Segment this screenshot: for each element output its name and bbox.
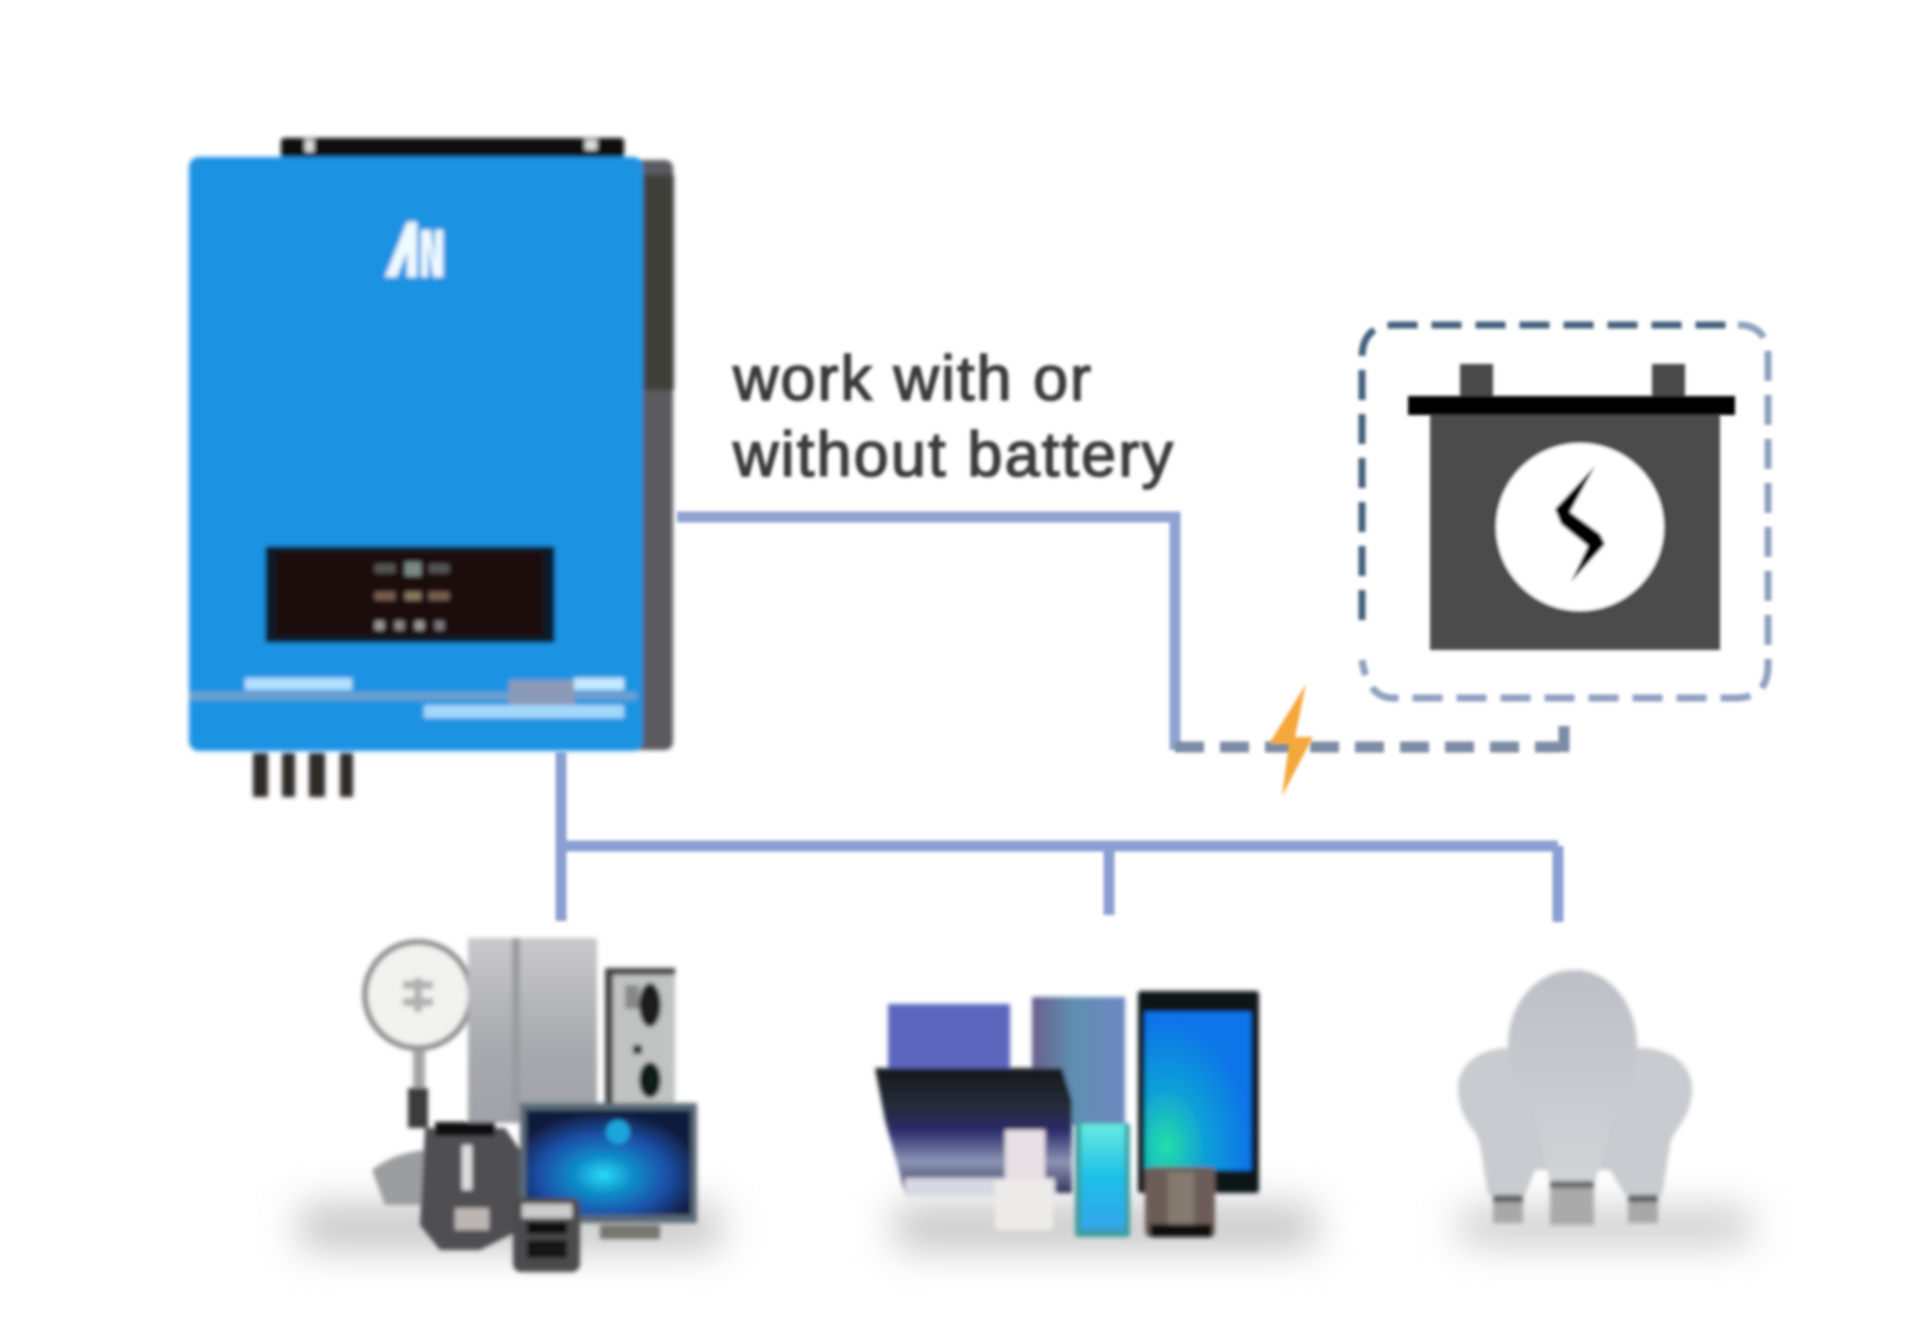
inverter	[189, 138, 674, 797]
cooker	[420, 1122, 520, 1250]
rear laptop	[888, 1004, 1010, 1068]
left and right bulbs	[1458, 1048, 1692, 1195]
top bracket	[281, 138, 624, 162]
connection lines	[561, 517, 1558, 922]
household appliances	[365, 938, 697, 1272]
earbuds	[995, 1130, 1053, 1230]
light bulbs	[1458, 970, 1692, 1225]
lightning bolt	[1269, 684, 1313, 796]
front panel stripes	[189, 678, 637, 718]
refrigerator	[468, 938, 597, 1123]
screw bases	[1493, 1181, 1658, 1225]
dashed battery link	[1175, 726, 1564, 752]
phone	[1075, 1123, 1130, 1237]
middle tablet	[1032, 997, 1125, 1125]
front laptop	[875, 1068, 1072, 1196]
caption: work with or	[732, 344, 1091, 414]
connectors	[253, 753, 353, 797]
centre bulb	[1508, 970, 1637, 1182]
display	[265, 546, 555, 643]
speaker	[1145, 1167, 1215, 1237]
blue body	[189, 157, 643, 751]
consumer electronics	[875, 991, 1259, 1237]
battery icon	[1408, 364, 1735, 650]
tower speaker	[605, 968, 675, 1105]
logo	[385, 222, 443, 277]
fan	[365, 942, 471, 1205]
caption	[732, 344, 1174, 490]
monitor	[520, 1103, 697, 1239]
small device	[513, 1198, 580, 1272]
caption: without battery	[732, 420, 1174, 490]
ground shadows	[300, 1205, 1750, 1249]
side panel	[627, 160, 674, 750]
right tablet	[1138, 991, 1259, 1193]
battery dashed frame	[1362, 325, 1768, 698]
